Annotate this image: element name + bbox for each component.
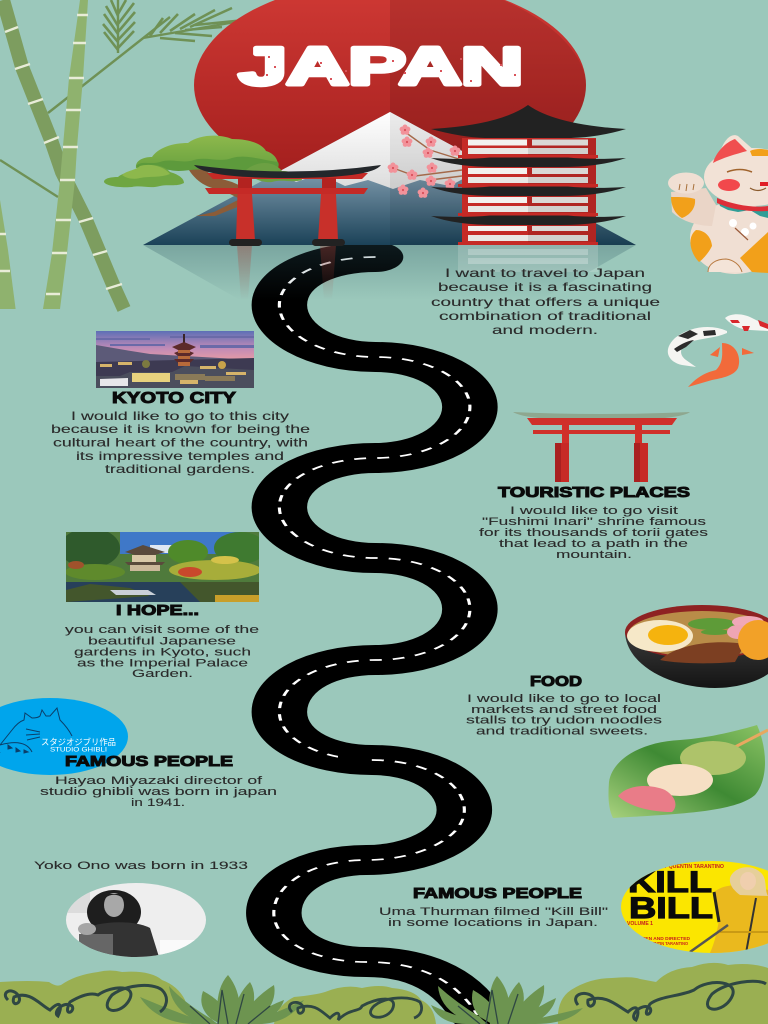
uma thurman text [379, 906, 608, 929]
cat patch [690, 230, 712, 262]
scribbles [5, 985, 166, 1016]
kyoto text: traditional gardens. [105, 462, 255, 476]
touristic text: "Fushimi Inari" shrine famous [482, 516, 707, 528]
i hope text [65, 624, 259, 680]
miyazaki text: Hayao Miyazaki director of [55, 775, 263, 787]
kill bill poster [620, 861, 768, 953]
food text: and traditional sweets. [476, 726, 648, 738]
i hope text: gardens in Kyoto, such [74, 646, 251, 658]
food text: stalls to try udon noodles [466, 715, 663, 727]
kyoto text [51, 409, 310, 476]
lucky cat [668, 135, 768, 274]
food text [466, 693, 663, 738]
right bush [558, 963, 768, 1024]
koi fish [668, 314, 768, 387]
ghibli logo: STUDIO GHIBLI [50, 746, 107, 754]
kill bill poster: VOLUME 1 [627, 921, 653, 927]
intro text: and modern. [492, 323, 598, 337]
kyoto text: I would like to go to this city [71, 409, 289, 423]
torii gate [194, 165, 381, 246]
yoko ono text: Yoko Ono was born in 1933 [34, 860, 248, 872]
mount fuji [143, 112, 636, 245]
cat body [690, 202, 768, 274]
left plant [140, 975, 304, 1024]
touristic text: mountain. [556, 549, 632, 561]
garden photo [66, 532, 259, 602]
touristic text: that lead to a path in the [499, 538, 688, 550]
food text: markets and street food [471, 704, 657, 716]
intro text: I want to travel to Japan [445, 266, 645, 280]
ghibli logo: スタジオジブリ作品 [41, 737, 116, 747]
red sun [194, 0, 586, 190]
kill bill poster: BY QUENTIN TARANTINO [660, 864, 724, 870]
miyazaki text [40, 775, 277, 809]
heading: food: FOOD [530, 674, 582, 690]
ramen bowl [625, 605, 768, 688]
road [274, 257, 477, 1015]
middle bush [274, 986, 436, 1024]
uma thurman text: in some locations in Japan. [388, 917, 598, 929]
cat arm [671, 188, 716, 226]
bottom foliage [0, 963, 768, 1024]
kyoto text: its impressive temples and [76, 449, 284, 463]
miyazaki text: in 1941. [131, 797, 185, 809]
intro text: because it is a fascinating [438, 280, 652, 294]
yoko ono photo [66, 883, 206, 958]
left bush [0, 970, 190, 1024]
intro text: combination of traditional [439, 309, 651, 323]
kill bill poster: WRITTEN AND DIRECTED [630, 936, 691, 941]
cherry blossoms [388, 124, 462, 198]
title [239, 38, 523, 96]
kyoto text: because it is known for being the [51, 422, 310, 436]
heading: kyoto: KYOTO CITY [112, 390, 237, 407]
kill bill poster: BILL [629, 892, 713, 925]
cat collar [718, 200, 768, 218]
pagoda [431, 105, 626, 245]
heading: famous people right: FAMOUS PEOPLE [413, 886, 582, 902]
cat coin [740, 232, 768, 273]
intro text [431, 266, 660, 337]
i hope text: Garden. [132, 668, 193, 680]
uma thurman text: Uma Thurman filmed "Kill Bill" [379, 906, 608, 918]
miyazaki text: studio ghibli was born in japan [40, 786, 277, 798]
heading: touristic places: TOURISTIC PLACES [498, 485, 690, 501]
right plant [431, 976, 583, 1024]
bamboo grove [0, 0, 247, 309]
ghibli logo [0, 698, 128, 775]
heading: i hope: I HOPE... [116, 603, 199, 619]
kill bill poster: BY QUENTIN TARANTINO [640, 941, 688, 946]
heading: famous people left: FAMOUS PEOPLE [65, 754, 233, 770]
food text: I would like to go to local [467, 693, 661, 705]
touristic text: for its thousands of torii gates [479, 527, 709, 539]
intro text: country that offers a unique [431, 295, 660, 309]
cat paw [668, 172, 704, 194]
torii photo [513, 412, 690, 482]
i hope text: you can visit some of the [65, 624, 259, 636]
bonsai pine [104, 136, 302, 216]
cat head [704, 148, 768, 206]
kill bill poster: KILL [628, 866, 712, 899]
title: JAPAN [239, 38, 523, 96]
touristic text: I would like to go visit [510, 505, 678, 517]
touristic text [479, 505, 709, 561]
mochi dango on leaf [608, 725, 768, 818]
i hope text: beautiful Japanese [88, 636, 236, 648]
kyoto text: cultural heart of the country, with [53, 436, 308, 450]
i hope text: as the Imperial Palace [77, 658, 248, 670]
kyoto photo [96, 331, 254, 390]
mountain reflection [143, 245, 636, 300]
